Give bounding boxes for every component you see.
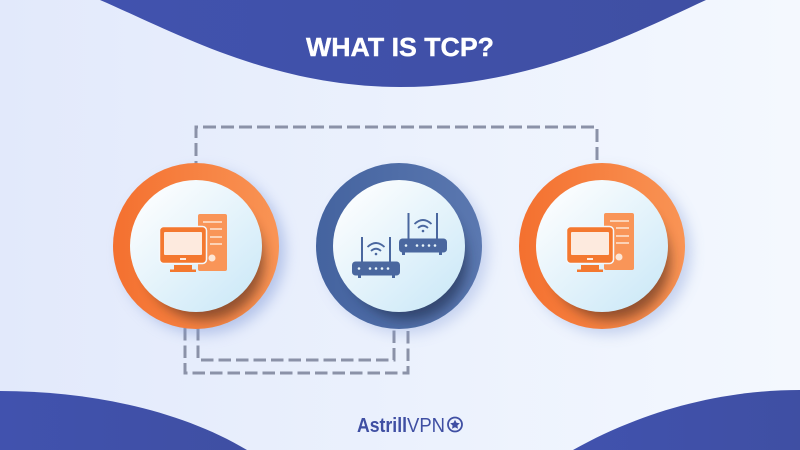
bottom right wave — [573, 390, 800, 450]
inner bottom dashed connection — [198, 328, 394, 360]
title: WHAT IS TCP? — [306, 32, 494, 62]
bottom left wave — [0, 391, 247, 450]
top dashed connection — [196, 127, 597, 164]
icon: router lower — [352, 237, 400, 278]
node: middle routers — [316, 163, 488, 334]
logo: AstrillVPN: Astrill — [357, 415, 407, 437]
outer bottom dashed connection — [185, 328, 408, 373]
node: left computer — [113, 163, 285, 334]
logo: AstrillVPN — [357, 415, 462, 437]
icon: router upper — [399, 213, 447, 255]
node: right computer — [519, 163, 691, 334]
logo: AstrillVPN: VPN — [407, 415, 445, 437]
icon: computer — [160, 214, 227, 272]
icon: computer — [566, 213, 634, 272]
top banner wave — [100, 0, 706, 87]
